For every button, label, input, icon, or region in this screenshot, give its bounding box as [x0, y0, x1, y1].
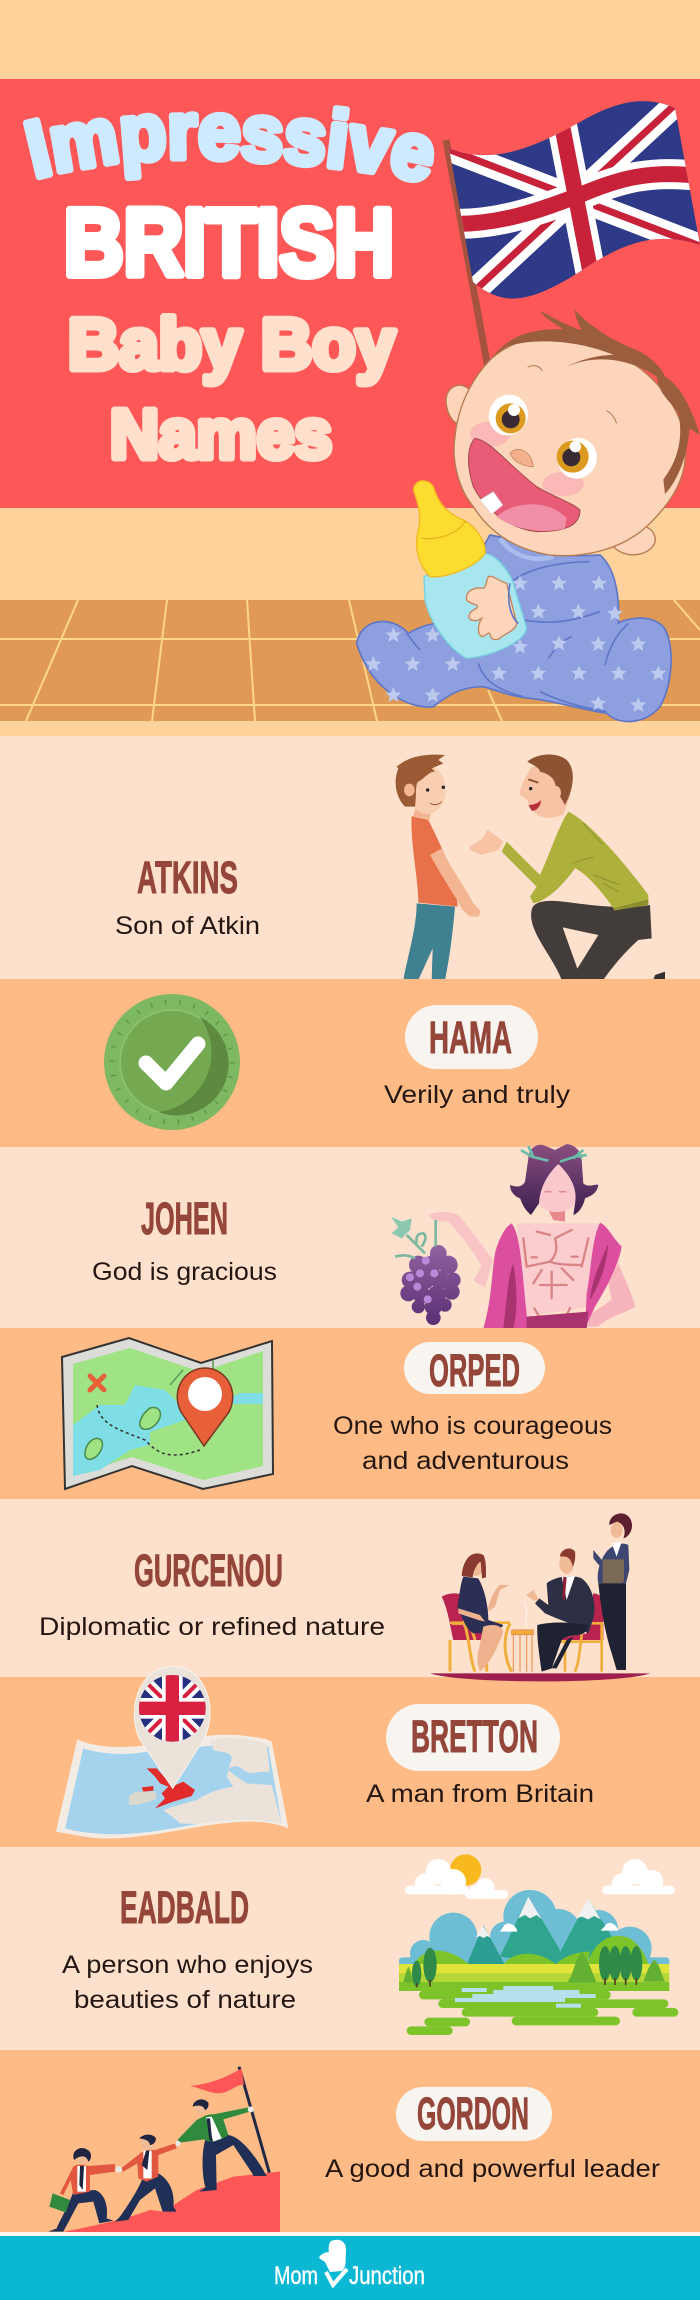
meaning: Son of Atkin	[115, 912, 260, 940]
trees	[412, 1946, 642, 1986]
hand	[466, 576, 517, 640]
name: JOHEN: JOHEN	[141, 1193, 228, 1244]
meaning: A man from Britain	[366, 1780, 594, 1808]
meaning line 2: beauties of nature	[74, 1986, 296, 2014]
meaning: A good and powerful leader	[325, 2155, 660, 2183]
illustration: map with UK pin	[56, 1667, 288, 1838]
mountains	[500, 1897, 560, 1965]
name: ATKINS: ATKINS	[137, 852, 238, 903]
illustration: team climbing to flag	[48, 2067, 280, 2232]
map sheet	[56, 1735, 288, 1838]
blush	[470, 421, 510, 447]
panel: Eadbald	[0, 1847, 700, 2050]
pin	[134, 1667, 210, 1788]
neck and face	[548, 1210, 565, 1222]
head	[454, 336, 686, 556]
sun	[450, 1854, 481, 1886]
seated man	[535, 1576, 595, 1633]
logo wordmark: Junction: Junction	[349, 2262, 425, 2290]
illustration: diplomatic meeting	[430, 1513, 650, 1681]
illustration: Dionysus with grapes	[391, 1144, 635, 1329]
wreath	[521, 1146, 587, 1162]
bottle	[424, 553, 527, 658]
eyes	[482, 388, 535, 442]
meaning: God is gracious	[92, 1258, 277, 1286]
right chair	[547, 1593, 603, 1640]
illustration: landscape	[399, 1854, 678, 2035]
panel: Hama	[0, 979, 700, 1147]
panel: Gurcenou	[0, 1499, 700, 1677]
title: Names: Names	[110, 395, 332, 473]
name: HAMA: HAMA	[429, 1012, 512, 1063]
name pill	[396, 2087, 552, 2141]
vine and leaf	[395, 1220, 436, 1258]
meaning: One who is courageous	[333, 1412, 612, 1440]
blue hills	[399, 1890, 669, 1970]
illustration: treasure map	[62, 1338, 273, 1489]
title: Impressive: Impressive	[23, 105, 434, 183]
red wall	[0, 79, 700, 508]
name pill	[405, 1005, 538, 1069]
standing woman	[598, 1544, 629, 1583]
lake	[455, 1986, 596, 2008]
boy	[396, 755, 481, 980]
name: GORDON: GORDON	[417, 2088, 529, 2139]
illustration: man talking to boy	[396, 755, 665, 980]
footer	[0, 2232, 700, 2300]
ears	[446, 385, 470, 425]
name: BRETTON: BRETTON	[411, 1711, 538, 1762]
name: EADBALD: EADBALD	[120, 1882, 249, 1933]
hill	[63, 2172, 280, 2232]
middle climber	[115, 2173, 177, 2222]
name: ORPED: ORPED	[429, 1345, 520, 1396]
logo icon	[319, 2240, 346, 2272]
table	[512, 1630, 533, 1672]
bushes	[403, 1952, 665, 1983]
robe	[483, 1223, 528, 1329]
panel: Atkins	[0, 736, 700, 980]
mouth	[469, 438, 580, 532]
leader	[199, 2135, 267, 2192]
header panel	[0, 79, 700, 722]
meaning line 2: and adventurous	[362, 1447, 569, 1475]
hair	[492, 310, 700, 494]
logo: MomJunction	[274, 2240, 425, 2290]
icon: green check badge	[104, 994, 240, 1130]
nose	[510, 449, 533, 467]
seated woman	[457, 1577, 503, 1633]
grass strips	[407, 1991, 678, 2035]
panel: Johen	[0, 1144, 700, 1329]
hair	[510, 1144, 598, 1215]
flag and pole	[239, 2067, 269, 2173]
arm	[428, 1212, 493, 1287]
left chair	[442, 1593, 500, 1640]
clouds	[405, 1859, 675, 1899]
fields	[399, 1964, 669, 1974]
icon: union jack flag	[440, 90, 700, 368]
baby suit	[357, 535, 671, 722]
land	[163, 1738, 282, 1824]
logo wordmark: Mom: Mom	[274, 2262, 318, 2290]
UK	[147, 1768, 195, 1808]
meaning: Verily and truly	[384, 1081, 571, 1109]
title: BRITISH: BRITISH	[64, 190, 394, 296]
name pill	[404, 1342, 545, 1394]
grapes	[400, 1245, 461, 1325]
green hills	[413, 1936, 648, 1965]
tiled floor	[0, 600, 700, 721]
meaning: A person who enjoys	[62, 1951, 313, 1979]
man	[470, 755, 665, 980]
illustration: baby with bottle	[357, 310, 700, 722]
title: Baby Boy: Baby Boy	[68, 305, 395, 385]
name pill	[386, 1704, 560, 1771]
rug	[430, 1673, 650, 1681]
torso	[517, 1223, 598, 1317]
panel: Orped	[0, 1328, 700, 1499]
panel: Bretton	[0, 1667, 700, 1847]
meaning: Diplomatic or refined nature	[39, 1613, 385, 1641]
panel: Gordon	[0, 2050, 700, 2232]
rear climber with briefcase	[48, 2190, 113, 2232]
name: GURCENOU: GURCENOU	[134, 1545, 283, 1596]
